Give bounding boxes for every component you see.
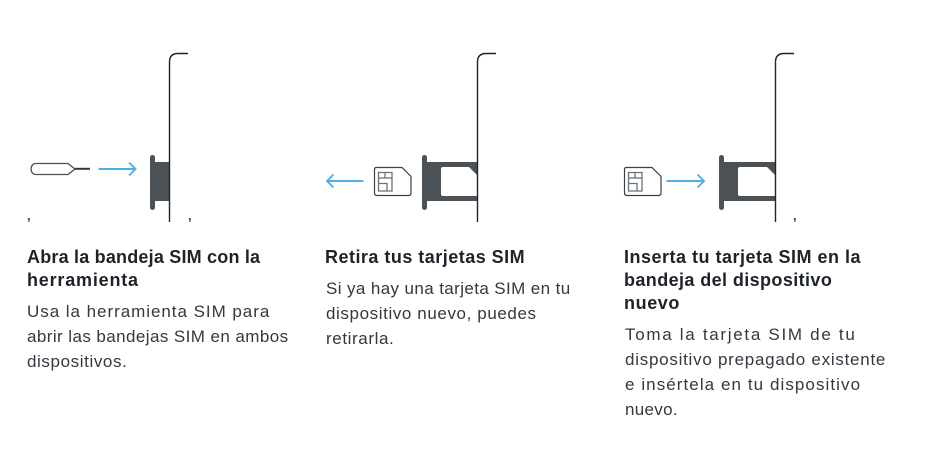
body text: step 2: retirarla. [326, 329, 394, 348]
arrow: right [666, 174, 704, 188]
body text: step 1 [27, 302, 289, 371]
arrow: right [98, 162, 136, 176]
arrow: left [327, 174, 364, 188]
illustration: remove SIM [327, 54, 496, 222]
body text: step 2 [326, 279, 571, 348]
device outline [170, 54, 188, 222]
heading: step 3: Inserta tu tarjeta SIM en la [624, 247, 861, 267]
stray mark 3: , [793, 208, 797, 223]
body text: step 2: Si ya hay una tarjeta SIM en tu [326, 279, 571, 298]
icon: SIM card [374, 168, 411, 196]
body text: step 2: dispositivo nuevo, puedes [326, 304, 537, 323]
heading: step 2: Retira tus tarjetas SIM [325, 247, 525, 267]
heading: step 3: nuevo [624, 293, 680, 313]
icon: SIM tool [31, 164, 90, 174]
heading: step 1 [27, 247, 260, 290]
icon: tray with empty slot [422, 155, 477, 210]
body text: step 1: abrir las bandejas SIM en ambos [27, 327, 289, 346]
body text: step 3: nuevo. [625, 400, 678, 419]
stray mark 1: , [27, 208, 31, 223]
body text: step 1: dispositivos. [27, 352, 127, 371]
icon: SIM card [624, 168, 661, 196]
body text: step 3: e insértela en tu dispositivo [625, 375, 861, 394]
body text: step 1: Usa la herramienta SIM para [27, 302, 270, 321]
heading: step 1: Abra la bandeja SIM con la [27, 247, 260, 267]
device outline [776, 54, 794, 222]
body text: step 3: Toma la tarjeta SIM de tu [625, 325, 856, 344]
body text: step 3: dispositivo prepagado existente [625, 350, 886, 369]
illustration: insert SIM [624, 54, 794, 222]
heading: step 3 [624, 247, 861, 313]
icon: tray side view [150, 155, 169, 210]
heading: step 1: herramienta [27, 270, 139, 290]
device outline [478, 54, 496, 222]
heading: step 3: bandeja del dispositivo [624, 270, 832, 290]
illustration: open tray with SIM tool [31, 54, 188, 222]
body text: step 3 [625, 325, 886, 419]
icon: tray with empty slot [719, 155, 775, 210]
stray mark 2: , [188, 208, 192, 223]
